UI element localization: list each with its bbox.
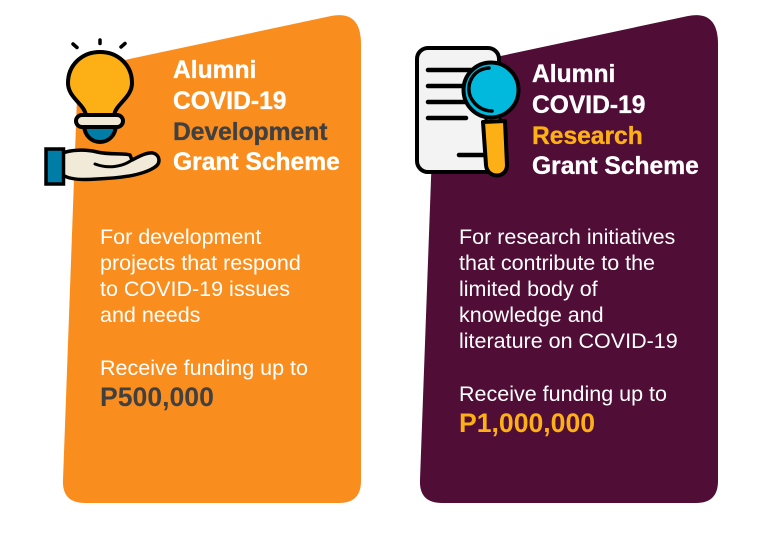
text: research description: For research initiatives (459, 225, 675, 249)
text: development description: For development (100, 225, 261, 249)
text: development description: projects that respond (100, 251, 301, 275)
heading: development grant (173, 57, 340, 176)
panel: development grant (63, 15, 361, 503)
heading: development grant: COVID-19 (173, 88, 286, 115)
text: funding amount: P1,000,000 (459, 408, 595, 438)
text: research description: literature on COVID-19 (459, 329, 678, 353)
heading: research grant: COVID-19 (532, 92, 645, 119)
text: research description (459, 225, 678, 353)
icon: light bulb on hand (46, 40, 159, 184)
text: funding label: Receive funding up to (100, 356, 308, 380)
heading: research grant (532, 61, 699, 180)
text: development description (100, 225, 301, 327)
text: research description: limited body of (459, 277, 598, 301)
heading: development grant: Development (173, 119, 327, 146)
heading: development grant: Alumni (173, 57, 256, 84)
panel: research grant (420, 15, 718, 503)
text: development description: and needs (100, 303, 200, 327)
heading: research grant: Grant Scheme (532, 153, 699, 180)
text: funding label: Receive funding up to (459, 382, 667, 406)
heading: research grant: Alumni (532, 61, 615, 88)
text: development description: to COVID-19 issues (100, 277, 290, 301)
text: research description: knowledge and (459, 303, 604, 327)
text: funding amount: P500,000 (100, 382, 214, 412)
heading: research grant: Research (532, 123, 643, 150)
icon: document with magnifying glass (417, 48, 518, 176)
text: research description: that contribute to the (459, 251, 655, 275)
heading: development grant: Grant Scheme (173, 149, 340, 176)
